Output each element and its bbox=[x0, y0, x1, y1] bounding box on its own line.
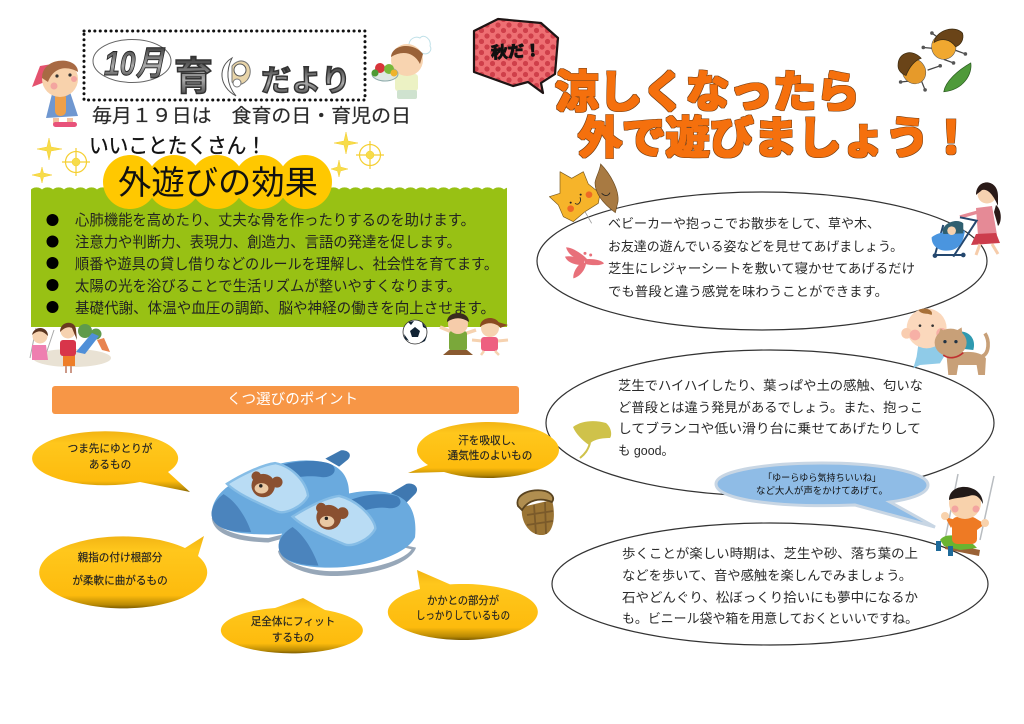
speech ellipse: crawling on grass: 芝生でハイハイしたり、葉っぱや土の感触、匂いな bbox=[618, 377, 923, 393]
main title bbox=[555, 68, 973, 163]
speech ellipse: crawling on grass bbox=[546, 350, 994, 496]
callout: firm heel: しっかりしているもの bbox=[416, 610, 510, 622]
illustration: chef boy with salad bbox=[372, 36, 431, 99]
speech ellipse: crawling on grass: ど普段とは違う発見があるでしょう。また、抱っこ bbox=[618, 400, 923, 415]
callout: blue speech bubble: 「ゆーらゆら気持ちいいね」 bbox=[763, 472, 881, 484]
speech ellipse: crawling on grass: してブランコや低い滑り台に乗せてあげたりして bbox=[618, 420, 921, 436]
speech ellipse: baby walks: ベビーカーや抱っこでお散歩をして、草や木、 bbox=[608, 216, 880, 231]
illustration: jumping children bbox=[440, 313, 508, 355]
callout: toe room bbox=[32, 431, 190, 492]
dotted title frame bbox=[84, 31, 365, 100]
speech ellipse: baby walks bbox=[537, 192, 987, 330]
title word: iku: 育 bbox=[174, 56, 213, 99]
front shoe bbox=[278, 484, 417, 576]
benefits list: 心肺機能を高めたり、丈夫な骨を作ったりするのを助けます。 bbox=[75, 212, 475, 229]
speech ellipse: walking on leaves: 歩くことが楽しい時期は、芝生や砂、落ち葉の上 bbox=[622, 546, 918, 561]
speech ellipse: walking on leaves bbox=[552, 523, 988, 645]
illustration: mother with stroller bbox=[932, 182, 1001, 258]
callout: blue speech bubble: など大人が声をかけてあげて。 bbox=[756, 485, 888, 497]
illustration: blue shoes bbox=[211, 450, 417, 576]
heading bar: shoe selection points bbox=[52, 386, 519, 414]
icons: sparkles bbox=[32, 132, 384, 183]
callout: toe room: つま先にゆとりが bbox=[68, 442, 153, 455]
heading bar: shoe selection points: くつ選びのポイント bbox=[227, 391, 358, 408]
speech ellipse: baby walks: お友達の遊んでいる姿などを見せてあげましょう。 bbox=[608, 239, 903, 254]
speech ellipse: walking on leaves: 石やどんぐり、松ぼっくり拾いにも夢中になるか bbox=[622, 590, 918, 605]
main title: 涼しくなったら bbox=[555, 68, 860, 117]
subtitle: food education and childcare day: 毎月１９日は 食育の日・育児の日 bbox=[92, 105, 411, 127]
benefits list: 順番や遊具の貸し借りなどのルールを理解し、社会性を育てます。 bbox=[75, 256, 498, 273]
benefits list bbox=[46, 212, 498, 317]
benefits list: 太陽の光を浴びることで生活リズムが整いやすくなります。 bbox=[75, 278, 461, 295]
speech ellipse: baby walks: 芝生にレジャーシートを敷いて寝かせてあげるだけ bbox=[608, 260, 915, 276]
scalloped green panel bbox=[31, 187, 507, 327]
illustration: boy on swing bbox=[936, 474, 994, 556]
callout: flexible at big toe joint: が柔軟に曲がるもの bbox=[72, 574, 168, 587]
back shoe bbox=[211, 450, 351, 542]
illustration: ginkgo leaf bbox=[573, 421, 611, 458]
speech ellipse: walking on leaves: などを歩いて、音や感触を楽しんでみましょう。 bbox=[622, 567, 912, 583]
callout: blue speech bubble bbox=[716, 463, 935, 527]
icon: soccer ball bbox=[403, 320, 427, 344]
benefits list: 注意力や判断力、表現力、創造力、言語の発達を促します。 bbox=[75, 234, 461, 251]
lead-in text: いいことたくさん！ bbox=[89, 135, 266, 158]
title callout: it's autumn bbox=[474, 19, 558, 93]
illustration: smiling autumn leaves bbox=[549, 164, 618, 223]
speech ellipse: crawling on grass: も good。 bbox=[618, 443, 674, 458]
illustration: dragonfly bbox=[565, 247, 604, 278]
callout: fits whole foot: するもの bbox=[272, 632, 314, 644]
callout: fits whole foot bbox=[221, 598, 363, 653]
speech ellipse: baby walks: でも普段と違う感覚を味わうことができます。 bbox=[608, 283, 888, 299]
benefits list: 基礎代謝、体温や血圧の調節、脳や神経の働きを向上させます。 bbox=[75, 300, 495, 317]
callout: breathable, sweat absorbing: 汗を吸収し、 bbox=[458, 434, 522, 447]
yellow cloud heading: 外遊びの効果 bbox=[118, 164, 318, 201]
illustration: plaid acorn bbox=[517, 490, 554, 535]
stroller bbox=[932, 217, 977, 258]
callout: flexible at big toe joint: 親指の付け根部分 bbox=[78, 551, 163, 564]
illustration: girl with bandana bbox=[32, 61, 78, 127]
callout: firm heel bbox=[388, 570, 538, 640]
callout: flexible at big toe joint bbox=[39, 536, 207, 608]
icon: baby in crescent moon bbox=[222, 58, 250, 96]
callout: fits whole foot: 足全体にフィット bbox=[251, 615, 335, 628]
callout: breathable, sweat absorbing bbox=[408, 422, 559, 478]
month badge: 10月 bbox=[104, 45, 166, 83]
illustration: playground with mother and child bbox=[30, 323, 111, 373]
main title: 外で遊びましょう！ bbox=[578, 114, 973, 163]
masthead: newsletter title bbox=[84, 31, 365, 100]
title word: dayori: だより bbox=[261, 65, 351, 98]
yellow cloud heading bbox=[103, 155, 332, 209]
callout: breathable, sweat absorbing: 通気性のよいもの bbox=[448, 449, 532, 462]
speech ellipse: walking on leaves: も。ビニール袋や箱を用意しておくといいですね。 bbox=[622, 611, 918, 626]
panel: benefits of outdoor play bbox=[31, 155, 507, 327]
callout: toe room: あるもの bbox=[89, 459, 131, 471]
illustration: acorn characters and leaf bbox=[897, 29, 971, 92]
title callout: it's autumn: 秋だ！ bbox=[491, 42, 542, 62]
illustration: baby and cat bbox=[901, 308, 988, 375]
callout: firm heel: かかとの部分が bbox=[427, 594, 499, 607]
